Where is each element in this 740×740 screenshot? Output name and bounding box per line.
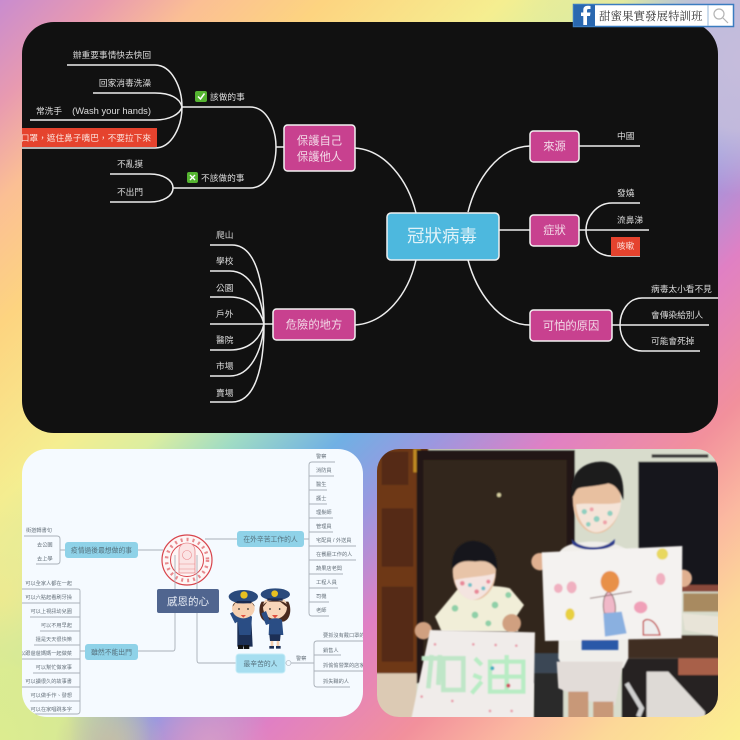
node: dangerous places [273, 309, 355, 340]
leaf labels: gratitude map: 可以不用早起 [41, 622, 73, 629]
leaf labels: right side: 發燒 [617, 187, 635, 198]
leaf labels: dangerous places: 醫院 [216, 334, 234, 345]
leaf labels: gratitude map: 抓失職的人 [323, 677, 349, 685]
icon: green cross [187, 172, 198, 183]
connector lines [22, 65, 718, 402]
node: even though can't go out: 雖然不能出門 [91, 648, 132, 656]
leaf labels: dangerous places [216, 230, 234, 398]
leaf labels: gratitude map: 可以讀很久的故事書 [25, 677, 72, 685]
leaf labels: right side: 可能會死掉 [651, 335, 695, 346]
leaf labels: right side [617, 130, 712, 346]
node: central topic: 冠狀病毒 [407, 226, 477, 246]
leaf labels: right side: 流鼻涕 [617, 214, 643, 225]
leaf labels: dangerous places: 公園 [216, 283, 233, 293]
icon: red seal stamp [162, 535, 212, 585]
node: hardest working people: 最辛苦的人 [244, 659, 278, 668]
panel: gratitude mind map [20, 449, 370, 717]
leaf labels: gratitude map: 可以全家人都在一起 [25, 579, 73, 587]
drawing held by younger child [410, 630, 535, 725]
node: source [530, 131, 579, 162]
node: hardest working people [236, 654, 285, 673]
leaf labels: right side: 病毒太小看不見 [651, 283, 712, 294]
node: symptoms: 症狀 [543, 223, 566, 237]
leaf labels: gratitude map: 管理員 [316, 522, 332, 530]
highlight: wear a mask [12, 128, 157, 147]
leaf labels: gratitude map: 街道轉書句 [26, 526, 52, 534]
leaf labels: gratitude map: 工程人員 [316, 578, 337, 586]
leaf labels: dangerous places: 賣場 [216, 387, 234, 398]
node: central topic [387, 213, 499, 260]
leaf labels: gratitude map: 護士 [316, 494, 326, 502]
panel: coronavirus mind map [12, 22, 718, 433]
leaf labels: gratitude map: 銷售人 [323, 646, 339, 654]
male officer [229, 590, 258, 649]
leaf labels: gratitude map: 宅配員 / 外送員 [316, 536, 351, 544]
leaf labels: protect left: 不亂摸 [117, 158, 143, 169]
badge: facebook page name [574, 4, 734, 26]
leaf labels: right side: 中國 [617, 130, 634, 141]
leaf labels: gratitude map: 醫生 [316, 480, 326, 488]
node: people working outside: 在外辛苦工作的人 [243, 534, 298, 544]
icon: police officers [229, 588, 290, 649]
panel: photo of two children holding drawings [375, 445, 720, 725]
leaf labels: gratitude map: 警察 [316, 452, 326, 460]
node: protect self and others [284, 125, 355, 171]
photo background [375, 445, 720, 725]
icon: green check [195, 91, 207, 102]
node: central gratitude: 感恩的心 [167, 595, 209, 608]
leaf labels: gratitude map: 可以上視訊幼兒園 [30, 607, 72, 615]
leaf labels: protect left: 辦重要事情快去快回 [73, 49, 151, 60]
leaf labels: gratitude map: 蔬果店老闆 [316, 564, 342, 572]
node: dangerous places: 危險的地方 [286, 318, 342, 332]
leaf labels: gratitude map [20, 452, 370, 713]
highlight: cough [611, 237, 640, 256]
older child [531, 462, 692, 725]
node: protect self and others: 保護自己 [297, 134, 342, 148]
node: even though can't go out [85, 644, 138, 660]
leaf labels: protect left [36, 49, 151, 197]
node: scary reasons: 可怕的原因 [543, 318, 599, 332]
node: scary reasons [530, 310, 612, 341]
highlight: wear a mask: 戴口罩，遮住鼻子嘴巴，不要拉下來 [12, 132, 151, 143]
leaf labels: gratitude map: 在餐廳工作的人 [316, 550, 352, 558]
female officer [259, 588, 290, 649]
node: people working outside [237, 531, 304, 547]
leaf labels: protect left: 回家消毒洗澡 [99, 77, 151, 88]
junction dot [286, 660, 291, 666]
leaf labels: gratitude map: 抓偷偷營業的店家 [323, 661, 365, 669]
leaf labels: gratitude map: 老師 [316, 606, 326, 614]
leaf labels: gratitude map: 去上學 [37, 554, 53, 562]
leaf labels: dangerous places: 爬山 [216, 230, 233, 240]
leaf labels: dangerous places: 戶外 [216, 308, 234, 319]
drawing held by older child [542, 546, 682, 650]
label: should do: 該做的事 [210, 91, 245, 102]
icon: search [714, 9, 728, 23]
leaf labels: right side: 會傳染給別人 [651, 309, 703, 320]
leaf labels: gratitude map: 警察 [296, 654, 306, 662]
leaf labels: gratitude map: 要抓沒有戴口罩的人 [323, 631, 370, 639]
leaf labels: protect left: 不出門 [117, 186, 143, 197]
highlight: cough: 咳嗽 [617, 240, 634, 251]
icon: facebook logo [574, 5, 595, 26]
leaf labels: dangerous places: 市場 [216, 360, 234, 371]
node: after the pandemic [65, 542, 138, 558]
leaf labels: gratitude map: 可以幫忙做家事 [36, 663, 72, 671]
node: central gratitude [157, 589, 219, 613]
leaf labels: gratitude map: 消防員 [316, 466, 332, 474]
badge: facebook page name: 甜蜜果實發展特訓班 [599, 9, 703, 23]
leaf labels: gratitude map: 還是天天很快樂 [36, 635, 72, 643]
leaf labels: dangerous places: 學校 [216, 255, 234, 266]
node: source: 來源 [543, 139, 566, 153]
leaf labels: protect left: (Wash your hands) [72, 105, 151, 116]
leaf labels: gratitude map: 可以在家唱跳多字 [30, 705, 72, 713]
leaf labels: gratitude map: 可以六點起看刷牙操 [25, 593, 72, 601]
node: symptoms [530, 215, 579, 246]
younger child [415, 541, 524, 639]
label: should not do: 不該做的事 [201, 172, 245, 183]
leaf labels: gratitude map: 可以做手作、發想 [30, 691, 72, 699]
leaf labels: gratitude map: 理髮師 [316, 508, 332, 516]
leaf labels: gratitude map: 去公園 [37, 540, 53, 548]
leaf labels: protect left: 常洗手 [36, 105, 62, 116]
connectors [22, 462, 363, 714]
leaf labels: gratitude map: 司機 [316, 592, 326, 600]
leaf labels: gratitude map: 以跟爸爸媽媽一起做菜 [20, 649, 72, 657]
node: protect self and others: 保護他人 [297, 150, 342, 164]
node: after the pandemic: 疫情過後最想做的事 [71, 546, 132, 554]
